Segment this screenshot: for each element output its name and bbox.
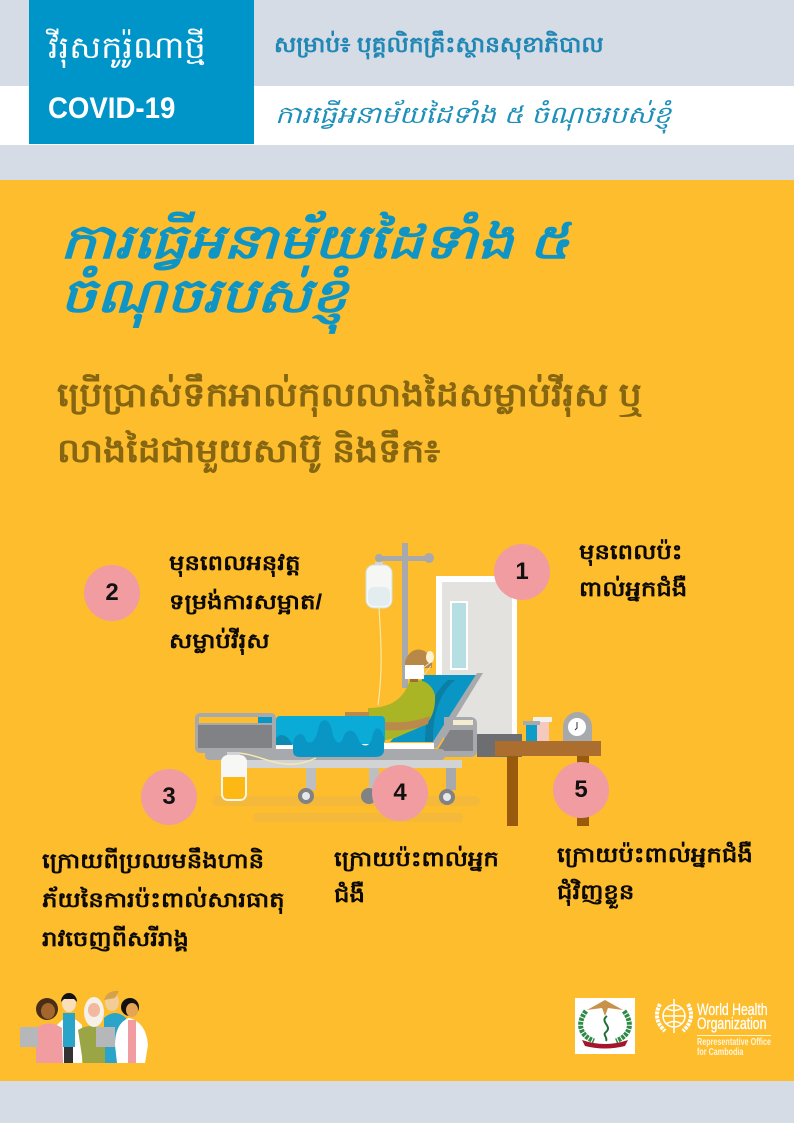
iv stand and bag bbox=[366, 543, 434, 705]
office lines bbox=[697, 1037, 771, 1058]
instruction text bbox=[57, 373, 642, 473]
label 4: ជំងឺ bbox=[334, 884, 365, 907]
urine bag bbox=[221, 752, 316, 801]
marker 2: 2 bbox=[105, 579, 119, 606]
header blue title box bbox=[29, 0, 254, 144]
worker: blue-vest man bbox=[57, 993, 82, 1063]
label 5 bbox=[557, 841, 753, 909]
instruction text: ប្រើប្រាស់ទឹកអាល់កុលលាងដៃសម្លាប់វីរុស ឬ bbox=[57, 376, 642, 413]
marker 5 bbox=[553, 762, 609, 818]
title: COVID-19: COVID-19 bbox=[48, 92, 175, 125]
blanket bbox=[276, 716, 385, 757]
bed bbox=[195, 713, 477, 805]
marker 5: 5 bbox=[574, 776, 588, 803]
label 1 bbox=[579, 539, 687, 602]
label 3: រាវចេញពីសរីរាង្គ bbox=[42, 928, 189, 951]
text: representative office bbox=[697, 1035, 771, 1058]
marker 4: 4 bbox=[393, 779, 407, 806]
marker 3 bbox=[141, 769, 197, 825]
subtitle line: ការធ្វើអនាម័យដៃទាំង ៥ ចំណុចរបស់ខ្ញុំ bbox=[275, 102, 671, 129]
label 5: ក្រោយប៉ះពាល់អ្នកជំងឺ bbox=[557, 844, 753, 867]
main heading bbox=[60, 210, 572, 334]
label 4: ក្រោយប៉ះពាល់អ្នក bbox=[334, 848, 499, 871]
table with items bbox=[495, 712, 601, 826]
label 2: ទម្រង់ការសម្អាត/ bbox=[169, 591, 322, 614]
door bbox=[436, 576, 522, 757]
backrest bbox=[390, 673, 483, 748]
text: World Health Organization: World Health bbox=[697, 1000, 768, 1019]
floor shadow bbox=[212, 796, 480, 822]
label 3: ក្រោយពីប្រឈមនឹងហានិ bbox=[42, 850, 264, 873]
office lines: for Cambodia bbox=[697, 1047, 743, 1058]
audience line: សម្រាប់៖ បុគ្គលិកគ្រឹះស្ថានសុខាភិបាល bbox=[274, 32, 604, 57]
worker: pink scrubs woman bbox=[20, 998, 63, 1063]
worker: hijab woman bbox=[78, 997, 115, 1063]
label 2 bbox=[169, 552, 322, 655]
logo: ministry of health bbox=[575, 998, 635, 1054]
instruction text: លាងដៃជាមួយសាប៊ូ និងទឹក៖ bbox=[57, 432, 440, 469]
label 1: មុនពេលប៉ះ bbox=[579, 541, 682, 564]
text: World Health Organization: Organization bbox=[697, 1014, 766, 1033]
logo: WHO bbox=[654, 999, 771, 1058]
patient bbox=[345, 650, 435, 742]
title: new coronavirus: វីរុសកូរ៉ូណាថ្មី bbox=[48, 30, 206, 65]
label 2: សម្លាប់វីរុស bbox=[169, 630, 270, 653]
label 1: ពាល់អ្នកជំងឺ bbox=[579, 578, 687, 601]
marker 4 bbox=[372, 765, 428, 821]
label 5: ជុំវិញខ្លួន bbox=[557, 881, 634, 904]
marker 1: 1 bbox=[515, 558, 529, 585]
label 2: មុនពេលអនុវត្ត bbox=[169, 552, 300, 575]
label 3 bbox=[42, 847, 285, 952]
header white band bbox=[0, 86, 794, 145]
main heading: ចំណុចរបស់ខ្ញុំ bbox=[60, 270, 347, 323]
marker 3: 3 bbox=[162, 783, 176, 810]
main heading: ការធ្វើអនាម័យដៃទាំង ៥ bbox=[60, 216, 570, 269]
label 4 bbox=[334, 846, 499, 907]
office lines: Representative Office bbox=[697, 1037, 771, 1048]
worker: teal scrubs bbox=[104, 991, 126, 1063]
label 3: ភ័យនៃការប៉ះពាល់សារធាតុ bbox=[42, 889, 285, 912]
marker 1 bbox=[494, 544, 550, 600]
worker: doctor in white coat bbox=[115, 998, 148, 1063]
icon: health workers group bbox=[20, 990, 148, 1063]
text: World Health Organization bbox=[696, 1000, 768, 1033]
marker 2 bbox=[84, 565, 140, 621]
icon: WHO emblem bbox=[654, 999, 694, 1033]
